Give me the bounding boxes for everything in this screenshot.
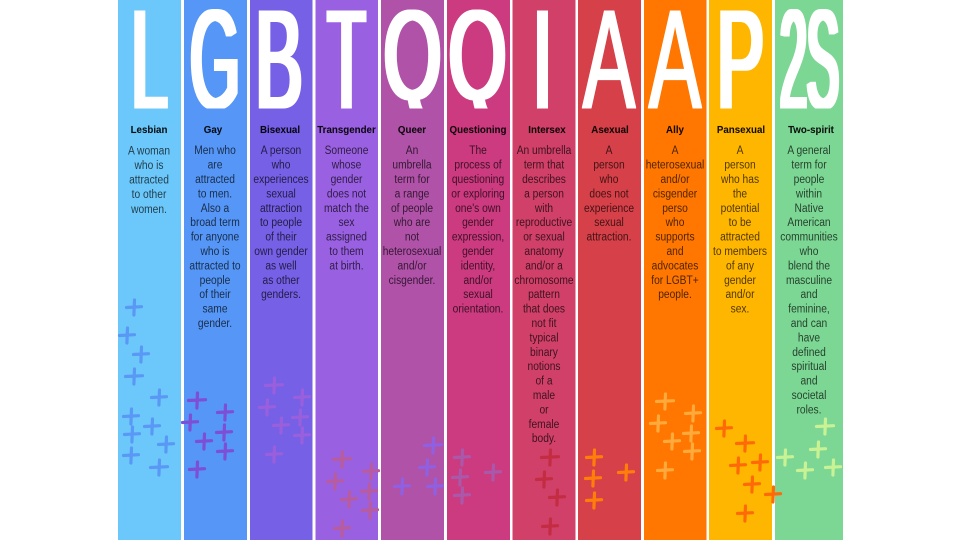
description: Two-spirit: blend the: [788, 260, 830, 273]
description: Intersex: typical: [529, 332, 559, 345]
description: Ally: A: [672, 144, 679, 157]
description: Queer: umbrella: [392, 159, 432, 172]
description: Pansexual: person: [724, 159, 756, 172]
description: Gay: of their: [199, 288, 231, 301]
description: Intersex: not fit: [531, 317, 557, 330]
description: Ally: people.: [658, 288, 692, 301]
description: Gay: same: [202, 303, 228, 316]
panel: Questioning: [447, 0, 510, 540]
description: Gay: broad term: [190, 216, 240, 229]
description: Questioning: and/or: [463, 274, 493, 287]
description: Bisexual: own gender: [254, 245, 308, 258]
description: Transgender: match the: [324, 202, 369, 215]
description: Intersex: a person: [524, 188, 564, 201]
description: Pansexual: gender: [724, 274, 756, 287]
icon: plus signs, Ally: [650, 394, 700, 478]
description: Gay: attracted to: [189, 260, 241, 273]
description: Intersex: and/or a: [525, 260, 563, 273]
description: Ally: supports: [655, 231, 695, 244]
description: Asexual: who: [599, 173, 618, 186]
panel: Lesbian: [118, 0, 181, 540]
description: Pansexual: to be: [729, 216, 751, 229]
description: Two-spirit: have: [798, 332, 820, 345]
description: Two-spirit: and: [800, 375, 818, 388]
description: Questioning: gender: [462, 245, 494, 258]
description: Transgender: does not: [327, 188, 367, 201]
description: Two-spirit: roles.: [796, 404, 822, 417]
description: Bisexual: of their: [265, 231, 297, 244]
description: Pansexual: A: [737, 144, 744, 157]
description: Two-spirit: societal: [792, 389, 826, 402]
description: Two-spirit: and can: [791, 317, 827, 330]
description: Pansexual: the: [733, 188, 747, 201]
icon: plus signs, Questioning: [452, 450, 500, 503]
description: Transgender: sex: [339, 216, 355, 229]
description: Queer: term for: [394, 173, 430, 186]
heading: Questioning: Questioning: [450, 125, 506, 136]
description: Two-spirit: who: [799, 245, 818, 258]
heading: Transgender: Transgender: [317, 125, 376, 136]
description: Gay: to men.: [198, 188, 232, 201]
description: Pansexual: attracted: [720, 231, 760, 244]
description: Lesbian: A woman: [128, 145, 170, 158]
description: Queer: not: [405, 231, 420, 244]
description: Lesbian: attracted: [129, 174, 169, 187]
description: Questioning: gender: [462, 216, 494, 229]
description: Gay: who is: [200, 245, 230, 258]
description: Ally: cisgender: [653, 188, 697, 201]
description: Bisexual: experiences: [253, 173, 309, 186]
description: Pansexual: and/or: [725, 288, 755, 301]
description: Intersex: or: [539, 404, 549, 417]
description: Ally: for LGBT+: [651, 274, 699, 287]
description: Intersex: that does: [523, 303, 565, 316]
description: Questioning: process of: [454, 159, 502, 172]
icon: plus signs, Lesbian: [120, 300, 174, 475]
description: Two-spirit: and: [800, 288, 818, 301]
description: Queer: a range: [395, 188, 429, 201]
description: Queer: heterosexual: [383, 245, 441, 258]
heading: Gay: Gay: [204, 125, 223, 136]
panel: Transgender: [316, 0, 378, 540]
description: Lesbian: who is: [134, 159, 164, 172]
description: Queer: of people: [391, 202, 433, 215]
description: Intersex: or sexual: [523, 231, 565, 244]
description: Two-spirit: defined: [792, 346, 826, 359]
description: Transgender: whose: [331, 159, 361, 172]
description: Queer: and/or: [397, 260, 427, 273]
description: Gay: Also a: [201, 202, 230, 215]
description: Intersex: reproductive: [516, 216, 572, 229]
description: Transgender: assigned: [326, 231, 367, 244]
description: Intersex: male: [533, 389, 555, 402]
infographic: LGBTQQIAAP2S glossary columns: [118, 0, 843, 540]
description: Two-spirit: within: [795, 188, 822, 201]
description: Bisexual: sexual: [266, 188, 296, 201]
icon: plus signs, Two-spirit: [778, 419, 840, 478]
description: Bisexual: to people: [260, 216, 302, 229]
description: Queer: cisgender.: [389, 274, 435, 287]
description: Intersex: female: [529, 418, 559, 431]
description: Intersex: of a: [535, 375, 553, 388]
icon: plus signs, Asexual: [586, 450, 634, 508]
description: Asexual: person: [593, 159, 625, 172]
description: Questioning: or exploring: [451, 188, 505, 201]
description: Two-spirit: term for: [791, 159, 827, 172]
description: Bisexual: as well: [265, 260, 297, 273]
description: Ally: and: [666, 245, 684, 258]
description: Questioning: sexual: [463, 288, 493, 301]
description: Pansexual: of any: [726, 260, 754, 273]
description: Bisexual: attraction: [260, 202, 302, 215]
icon: plus signs, Transgender: [328, 452, 378, 536]
heading: Bisexual: Bisexual: [260, 125, 300, 136]
description: Ally: advocates: [652, 260, 699, 273]
description: Lesbian: to other: [132, 188, 167, 201]
description: Pansexual: who has: [720, 173, 759, 186]
description: Queer: who are: [393, 216, 430, 229]
description: Gay: people: [200, 274, 230, 287]
description: Transgender: Someone: [325, 144, 368, 157]
panel: Gay: [184, 0, 247, 540]
description: Pansexual: potential: [721, 202, 759, 215]
icon: plus signs, Intersex: [536, 450, 564, 534]
description: Bisexual: as other: [263, 274, 300, 287]
description: Pansexual: to members: [713, 245, 767, 258]
panel: Asexual: [578, 0, 641, 540]
heading: Queer: Queer: [398, 125, 426, 136]
description: Questioning: The: [469, 144, 487, 157]
icon: plus signs, Gay: [182, 393, 232, 477]
description: Intersex: binary: [530, 346, 558, 359]
description: Two-spirit: communities: [780, 231, 838, 244]
description: Transgender: to them: [329, 245, 364, 258]
heading: Two-spirit: Two-spirit: [788, 125, 835, 136]
description: Intersex: An umbrella: [517, 144, 572, 157]
description: Asexual: experience: [584, 202, 634, 215]
description: Gay: Men who: [194, 144, 236, 157]
heading: Asexual: Asexual: [591, 125, 629, 136]
description: Questioning: identity,: [461, 260, 495, 273]
icon: plus signs, Bisexual: [260, 378, 310, 462]
description: Queer: An: [406, 144, 418, 157]
description: Asexual: does not: [589, 188, 629, 201]
description: Intersex: body.: [532, 432, 556, 445]
description: Questioning: expression,: [452, 231, 504, 244]
description: Intersex: anatomy: [524, 245, 564, 258]
description: Gay: attracted: [195, 173, 235, 186]
description: Ally: perso: [662, 202, 688, 215]
description: Ally: heterosexual: [646, 159, 704, 172]
heading: Lesbian: Lesbian: [131, 125, 167, 136]
description: Two-spirit: masculine: [786, 274, 832, 287]
description: Bisexual: who: [271, 159, 290, 172]
description: Ally: and/or: [660, 173, 690, 186]
description: Gay: gender.: [198, 317, 232, 330]
heading: Ally: Ally: [666, 125, 684, 136]
description: Transgender: at birth.: [329, 260, 364, 273]
description: Intersex: with: [534, 202, 553, 215]
description: Questioning: questioning: [452, 173, 504, 186]
description: Asexual: attraction.: [587, 231, 631, 244]
description: Two-spirit: spiritual: [791, 360, 827, 373]
description: Bisexual: genders.: [261, 288, 301, 301]
panel: Queer: [381, 0, 444, 540]
heading: Intersex: Intersex: [528, 125, 566, 136]
description: Intersex: describes: [522, 173, 566, 186]
panel: Two-spirit: [775, 0, 843, 540]
description: Two-spirit: American: [787, 216, 831, 229]
description: Gay: for anyone: [191, 231, 239, 244]
description: Two-spirit: people: [794, 173, 824, 186]
description: Intersex: pattern: [528, 288, 560, 301]
description: Gay: are: [208, 159, 222, 172]
panel: Ally: [644, 0, 706, 540]
description: Questioning: one's own: [455, 202, 501, 215]
description: Transgender: gender: [331, 173, 363, 186]
description: Ally: who: [665, 216, 684, 229]
description: Two-spirit: feminine,: [788, 303, 830, 316]
description: Two-spirit: Native: [794, 202, 824, 215]
description: Pansexual: sex.: [731, 303, 749, 316]
description: Bisexual: A person: [261, 144, 301, 157]
description: Asexual: A: [606, 144, 613, 157]
icon: plus signs, Queer: [394, 438, 442, 494]
description: Intersex: notions: [527, 360, 561, 373]
description: Lesbian: women.: [130, 203, 167, 216]
icon: plus signs, Pansexual: [716, 421, 780, 521]
heading: Pansexual: Pansexual: [717, 125, 765, 136]
description: Asexual: sexual: [594, 216, 624, 229]
description: Questioning: orientation.: [453, 303, 503, 316]
panel: Intersex: [512, 0, 576, 540]
description: Two-spirit: A general: [787, 144, 831, 157]
description: Intersex: chromosome: [514, 274, 574, 287]
panel: Bisexual: [250, 0, 312, 540]
panel: Pansexual: [709, 0, 772, 540]
description: Intersex: term that: [524, 159, 565, 172]
